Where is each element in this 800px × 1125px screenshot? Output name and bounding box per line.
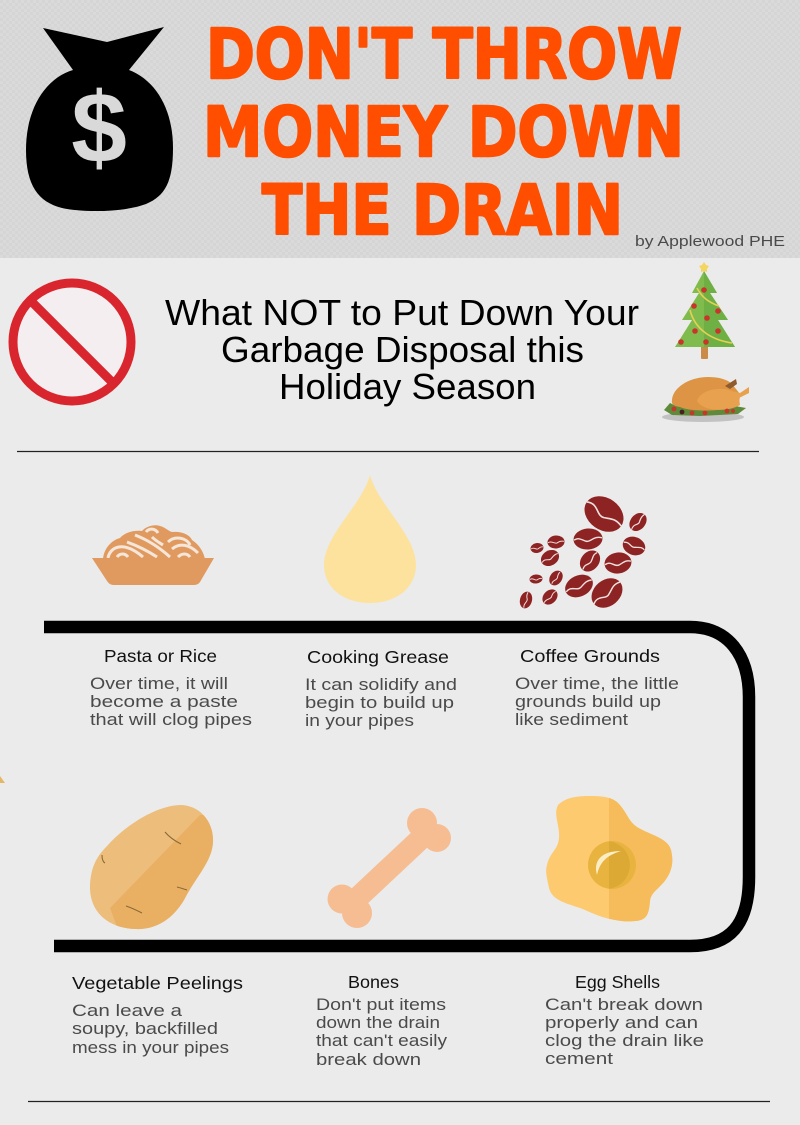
heading: Garbage Disposal this — [221, 329, 584, 370]
item: bones — [316, 972, 448, 1069]
icon: roast turkey — [662, 377, 749, 422]
item: coffee grounds: Coffee Grounds — [520, 646, 660, 666]
item: egg shells — [545, 972, 704, 1068]
icon: money bag: $ — [71, 72, 127, 184]
item: coffee grounds: Over time, the little — [515, 674, 679, 693]
icon: potato — [90, 805, 214, 930]
item: coffee grounds: like sediment — [515, 710, 628, 729]
item: cooking grease: It can solidify and — [305, 675, 457, 694]
item: pasta or rice: become a paste — [90, 692, 238, 711]
title: THE DRAIN — [262, 171, 623, 251]
item: cooking grease — [305, 647, 457, 730]
item: pasta or rice: that will clog pipes — [90, 710, 252, 729]
byline: by Applewood PHE — [635, 233, 785, 250]
item: egg shells: cement — [545, 1049, 613, 1068]
heading: What NOT to Put Down Your — [165, 292, 639, 333]
item: bones: that can't easily — [316, 1031, 448, 1050]
title — [203, 15, 684, 251]
title: DON'T THROW — [206, 15, 682, 95]
icon: coffee beans — [518, 489, 650, 614]
item: egg shells: properly and can — [545, 1013, 698, 1032]
divider: top — [17, 450, 759, 452]
heading: Holiday Season — [279, 366, 536, 407]
title: MONEY DOWN — [203, 93, 684, 173]
item: bones: break down — [316, 1050, 421, 1069]
item: bones: Bones — [348, 972, 399, 992]
item: vegetable peelings: Vegetable Peelings — [72, 973, 243, 993]
edge mark — [0, 776, 5, 783]
divider: bottom — [28, 1100, 770, 1102]
item: cooking grease: in your pipes — [305, 711, 414, 730]
header band — [0, 0, 800, 258]
icon: prohibition sign — [13, 283, 131, 401]
item: vegetable peelings: Can leave a — [72, 1001, 183, 1020]
item: egg shells: Egg Shells — [575, 972, 660, 992]
icon: fried egg — [546, 796, 672, 922]
icon: christmas tree — [675, 262, 735, 359]
item: bones: Don't put items — [316, 995, 446, 1014]
item: cooking grease: Cooking Grease — [307, 647, 449, 667]
item: cooking grease: begin to build up — [305, 693, 454, 712]
item: vegetable peelings: soupy, backfilled — [72, 1019, 218, 1038]
item: egg shells: Can't break down — [545, 995, 703, 1014]
icon: grease drop — [324, 475, 416, 603]
heading — [165, 292, 639, 407]
item: bones: down the drain — [316, 1013, 440, 1032]
item: coffee grounds — [515, 646, 679, 729]
icon: pasta bowl — [92, 525, 214, 585]
item: vegetable peelings — [72, 973, 243, 1057]
item: coffee grounds: grounds build up — [515, 692, 661, 711]
item: pasta or rice — [90, 646, 252, 729]
drain pipe track — [44, 627, 749, 946]
item: pasta or rice: Pasta or Rice — [104, 646, 217, 666]
item: pasta or rice: Over time, it will — [90, 674, 228, 693]
icon: bone — [328, 808, 451, 928]
icon: money bag — [26, 27, 173, 211]
item: vegetable peelings: mess in your pipes — [72, 1038, 229, 1057]
item: egg shells: clog the drain like — [545, 1031, 704, 1050]
